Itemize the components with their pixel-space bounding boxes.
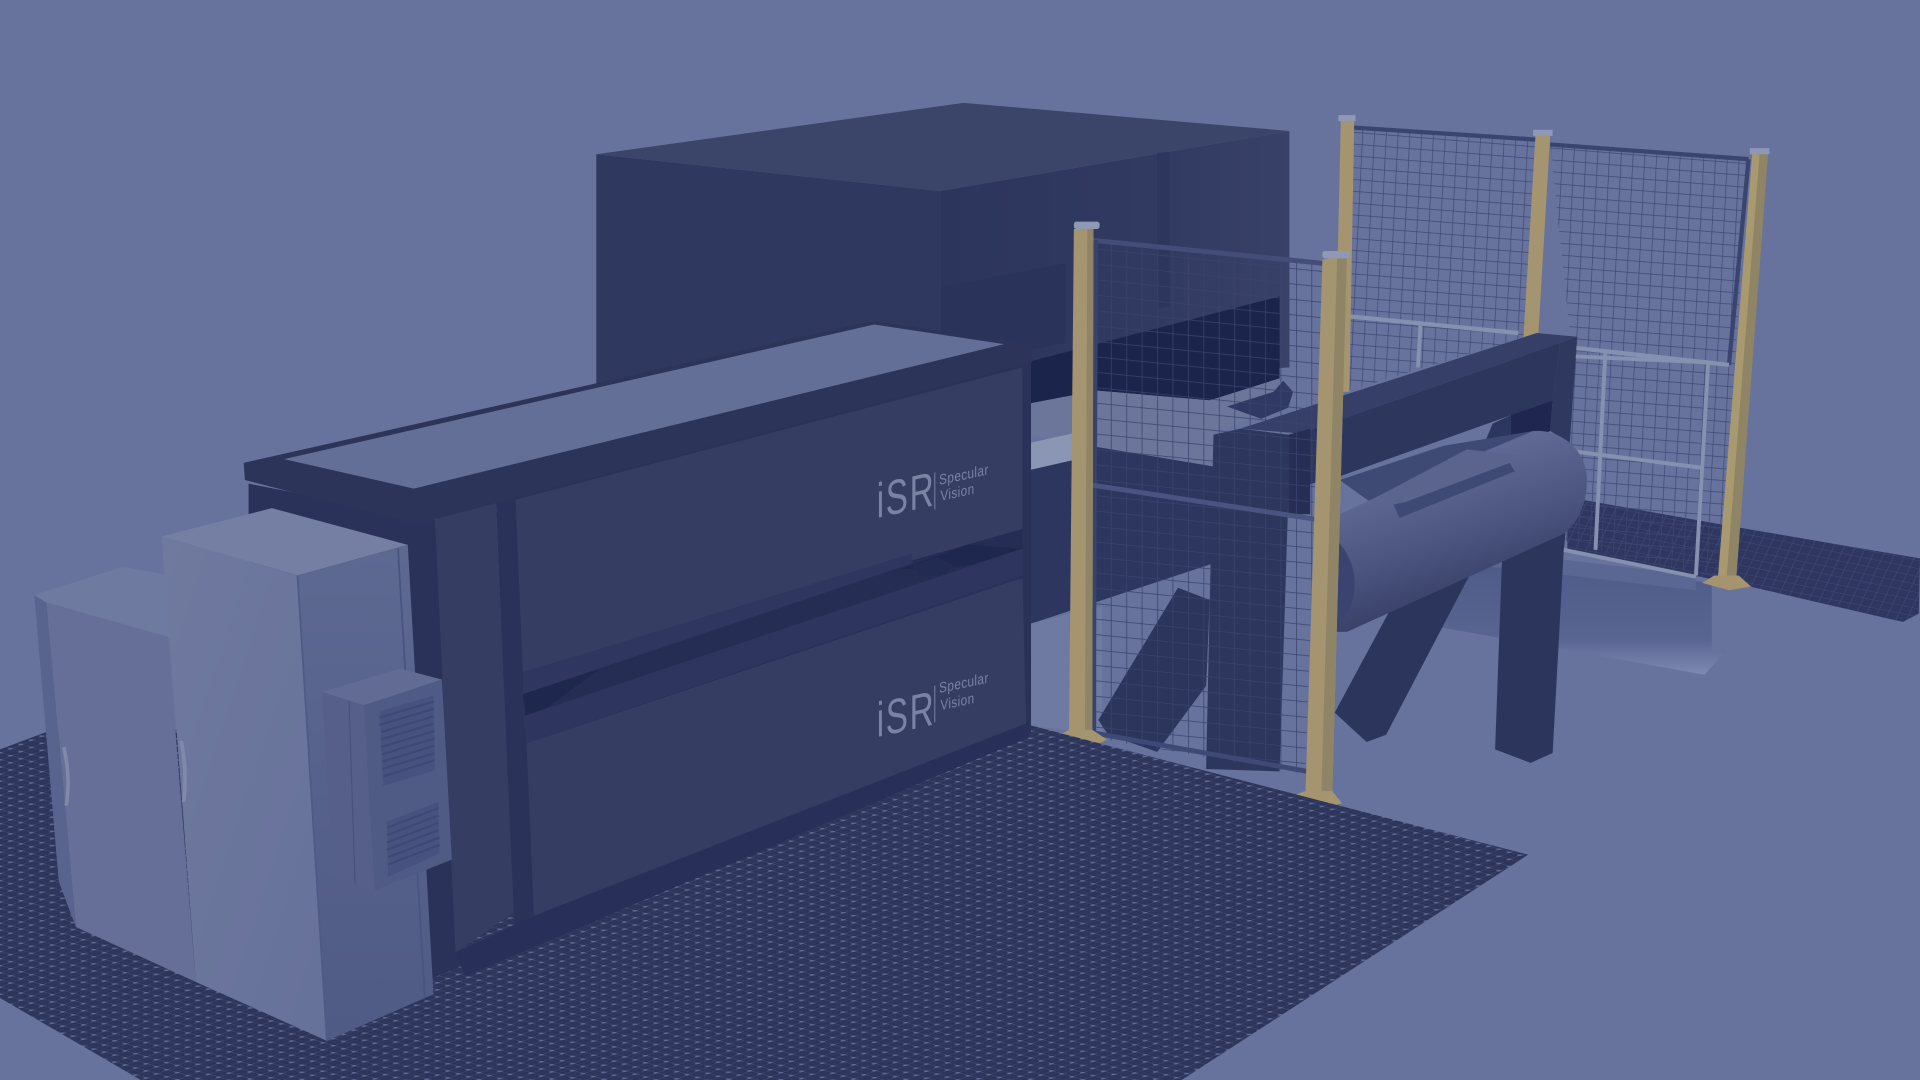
logo upper: [877, 461, 989, 528]
conveyor roller cylinder: [1325, 431, 1587, 632]
upper louvers: [380, 696, 435, 786]
top frame: [244, 321, 1032, 524]
air conditioning unit: [322, 669, 452, 890]
upper door panel: [516, 367, 1022, 672]
machine bottom skirt: [456, 722, 1029, 976]
logo upper: Specular: [939, 461, 989, 488]
front fence: [1053, 222, 1349, 811]
machine end frame: [249, 484, 459, 980]
logo lower: iSR: [877, 680, 935, 748]
main machine housing: [244, 321, 1032, 980]
end panel: [435, 502, 514, 953]
center slot: [523, 529, 1022, 743]
machine side frame: [514, 358, 1031, 928]
lower louvers: [387, 802, 440, 877]
conveyor tunnel: [1026, 296, 1293, 735]
back post 1: [1335, 115, 1356, 392]
large control cabinet: [162, 508, 433, 1041]
lower door panel: [527, 578, 1026, 916]
logo lower: Vision: [940, 690, 975, 713]
back fence: [1335, 115, 1769, 590]
logo upper: iSR: [877, 461, 935, 528]
floor grating: right: [1567, 497, 1920, 622]
back post 3: [1702, 148, 1769, 590]
front post left: [1053, 222, 1107, 749]
back mesh panel right: [1550, 144, 1749, 576]
portal frame: rear leg: [1495, 514, 1567, 763]
front mesh panel: [1090, 241, 1322, 774]
back post 2: [1523, 130, 1553, 340]
top light panel: [284, 324, 1004, 489]
back mesh panel left: [1344, 127, 1536, 392]
floor grating: main: [0, 725, 1528, 1080]
logo upper: Vision: [940, 480, 975, 504]
base plate: behind fence: [1439, 545, 1727, 675]
enclosure box: [596, 103, 1289, 392]
front post right: [1286, 251, 1349, 811]
portal frame: strut left: [1098, 588, 1210, 752]
small control cabinet: [34, 567, 196, 982]
portal frame: strut right: [1335, 576, 1469, 742]
portal frame: top beam: [1240, 333, 1577, 490]
logo lower: Specular: [939, 669, 989, 696]
portal frame: front column: [1206, 429, 1310, 771]
logo lower: [877, 669, 989, 748]
